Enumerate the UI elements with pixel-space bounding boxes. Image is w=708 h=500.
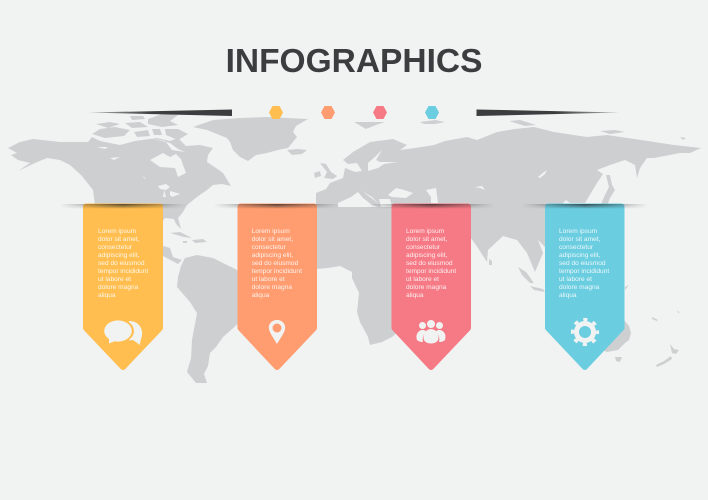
text block: orange panel: sed do eiusmod <box>252 260 298 267</box>
russian arctic islands <box>354 120 686 140</box>
text block: yellow panel <box>98 228 148 299</box>
text block: orange panel: consectetur <box>252 244 286 251</box>
sumatra and java <box>518 267 545 292</box>
text block: orange panel: adipiscing elit, <box>252 252 293 259</box>
text block: orange panel: Lorem ipsum <box>252 228 290 235</box>
icon: speech bubbles <box>103 319 142 345</box>
text block: yellow panel: ut labore et <box>98 276 131 283</box>
lake balkhash <box>475 186 485 190</box>
africa <box>316 206 400 345</box>
text block: red panel: consectetur <box>406 244 440 251</box>
text block: yellow panel: tempor incididunt <box>98 268 148 275</box>
text block: blue panel: ut labore et <box>559 276 592 283</box>
icon: group of people <box>416 320 446 344</box>
text block: yellow panel: dolor sit amet, <box>98 236 139 243</box>
south america <box>177 255 245 383</box>
text block: blue panel: aliqua <box>559 292 577 299</box>
text block: orange panel: dolore magna <box>252 284 292 291</box>
left wedge <box>88 110 232 116</box>
text block: orange panel <box>252 228 302 299</box>
icon: location pin <box>269 320 285 344</box>
cuba and caribbean <box>170 232 207 243</box>
title decoration row <box>64 106 644 370</box>
panel: yellow <box>60 204 186 367</box>
text block: blue panel: Lorem ipsum <box>559 228 597 235</box>
hudson bay <box>150 153 186 177</box>
text block: yellow panel: sed do eiusmod <box>98 260 145 267</box>
text block: red panel <box>406 228 456 299</box>
text block: red panel: adipiscing elit, <box>406 252 447 259</box>
text block: orange panel: dolor sit amet, <box>252 236 293 243</box>
text block: orange panel: aliqua <box>252 292 269 299</box>
japan <box>600 175 615 206</box>
text block: red panel: dolor sit amet, <box>406 236 447 243</box>
panel: blue <box>522 204 648 367</box>
title: INFOGRAPHICS <box>226 43 482 80</box>
text block: yellow panel: dolore magna <box>98 284 138 291</box>
greenland <box>193 117 308 161</box>
text block: orange panel: ut labore et <box>252 276 285 283</box>
text block: blue panel: dolore magna <box>559 284 599 291</box>
north america <box>8 137 231 264</box>
text block: blue panel: dolor sit amet, <box>559 236 600 243</box>
uk and ireland <box>314 163 337 179</box>
hexagon: yellow <box>269 106 283 119</box>
text block: blue panel: consectetur <box>559 244 593 251</box>
text block: red panel: ut labore et <box>406 276 439 283</box>
hexagon: red <box>373 106 387 119</box>
hexagon: blue <box>425 106 439 119</box>
text block: yellow panel: adipiscing elit, <box>98 252 139 259</box>
caspian sea <box>426 188 438 203</box>
australia <box>590 320 631 362</box>
text block: blue panel: tempor incididunt <box>559 268 609 275</box>
text block: orange panel: tempor incididunt <box>252 268 302 275</box>
text block: yellow panel: aliqua <box>98 292 116 299</box>
lake baikal <box>538 170 547 178</box>
arctic islands <box>92 113 188 140</box>
text block: blue panel: sed do eiusmod <box>559 260 606 267</box>
text block: red panel: Lorem ipsum <box>406 228 444 235</box>
icon: gear <box>572 320 598 344</box>
text block: yellow panel: consectetur <box>98 244 132 251</box>
iceland <box>287 149 307 155</box>
right wedge <box>476 110 620 116</box>
text block: red panel: dolore magna <box>406 284 446 291</box>
new zealand <box>656 344 679 367</box>
black sea <box>388 188 413 198</box>
text block: red panel: tempor incididunt <box>406 268 456 275</box>
text block: red panel: sed do eiusmod <box>406 260 453 267</box>
channels <box>97 138 185 180</box>
great lakes <box>158 184 180 197</box>
small pacific islands <box>625 285 680 321</box>
panel: red <box>368 204 494 367</box>
sri lanka <box>489 259 492 265</box>
text block: blue panel <box>559 228 610 299</box>
mediterranean <box>338 191 392 207</box>
text block: yellow panel: Lorem ipsum <box>98 228 136 235</box>
text block: blue panel: adipiscing elit, <box>559 252 600 259</box>
baltic sea <box>368 150 398 171</box>
hexagon: orange <box>321 106 335 119</box>
eurasia <box>316 127 701 272</box>
text block: red panel: aliqua <box>406 292 424 299</box>
panel: orange <box>214 204 340 367</box>
